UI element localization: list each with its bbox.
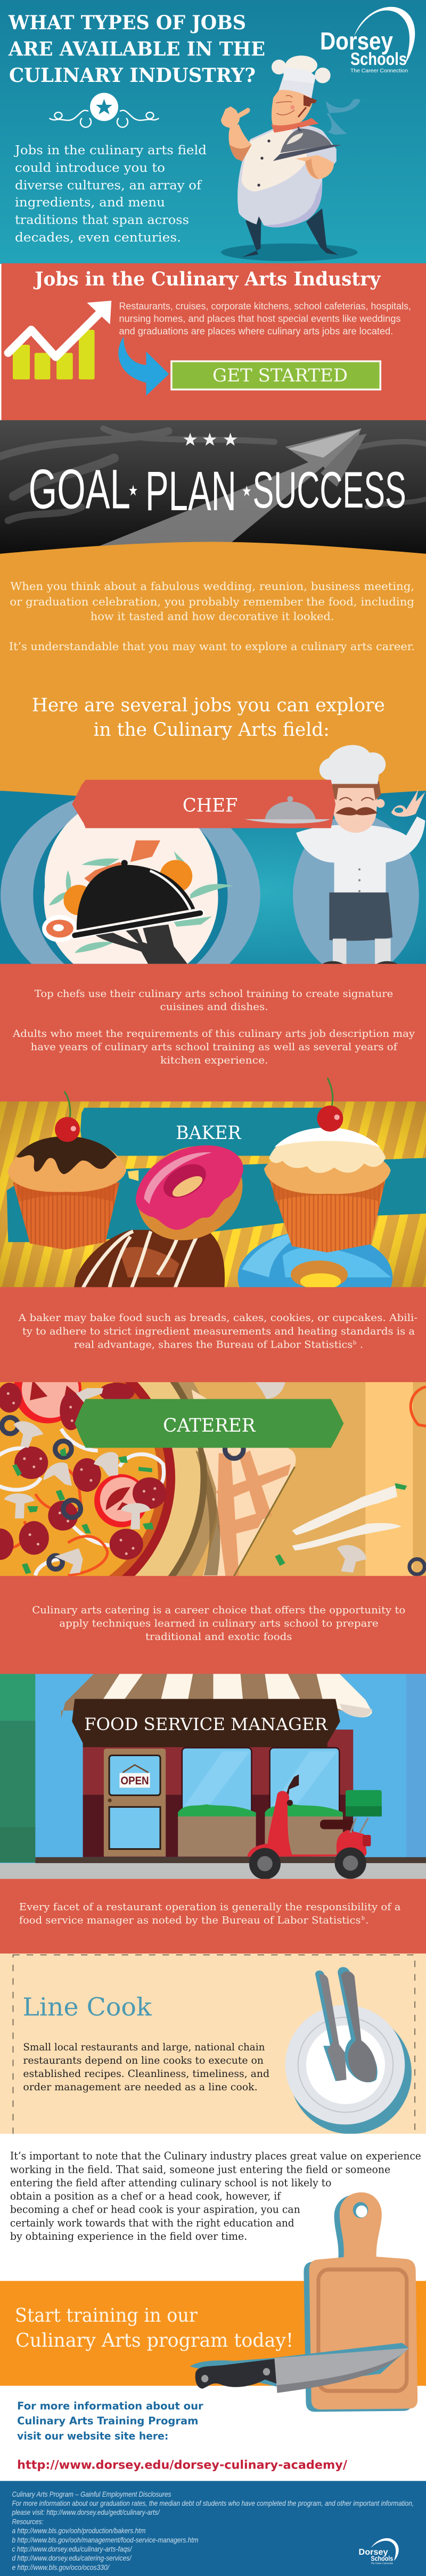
panel: baker description: . xyxy=(360,1340,363,1351)
sign: food service manager xyxy=(72,1699,340,1747)
napkin xyxy=(192,1390,296,1578)
illustration: pink donut xyxy=(121,1128,259,1258)
illustration: plate with fork and spoon xyxy=(285,1967,412,2134)
illustration: vanilla cupcake xyxy=(264,1078,391,1252)
logo: Dorsey Schools: Schools xyxy=(350,49,407,69)
arrow: chalk xyxy=(81,428,367,553)
title xyxy=(8,11,265,87)
description text: order management are needed as a line cook. xyxy=(23,2082,258,2093)
intro paragraph: When you think about a fabulous wedding, reunion, business meeting, xyxy=(10,580,414,593)
button: get started xyxy=(171,361,380,389)
illustration: mustached chef xyxy=(296,745,425,978)
heading: Line Cook xyxy=(22,1992,152,2022)
intro paragraph: how it tasted and how decorative it looked. xyxy=(91,610,334,622)
pizza xyxy=(0,1382,176,1576)
disclosure text: b http://www.bls.gov/ooh/management/food-service-managers.htm xyxy=(12,2536,199,2544)
experience text: becoming a chef or head cook is your aspiration, you can xyxy=(10,2204,300,2216)
panel: chef description: cuisines and dishes. xyxy=(160,1001,268,1012)
door: OPEN xyxy=(121,1774,149,1787)
button: get started: GET STARTED xyxy=(212,365,348,386)
cta text xyxy=(15,2305,293,2351)
panel: food service manager description: Every facet of a restaurant operation is generally the responsibility of a xyxy=(19,1901,401,1913)
banner: caterer xyxy=(75,1399,343,1448)
illustration: blue donut xyxy=(237,1231,392,1324)
section heading xyxy=(32,695,385,741)
panel: hero xyxy=(0,0,426,264)
description text: and graduations are places where culinary arts jobs are located. xyxy=(119,326,393,337)
experience text xyxy=(10,2151,421,2242)
panel: chef description: Adults who meet the requirements of this culinary arts job description may xyxy=(12,1028,415,1040)
banner: baker xyxy=(80,1108,323,1156)
intro text: could introduce you to xyxy=(15,161,165,175)
banner: chef xyxy=(72,780,335,828)
panel: closing note and call to action xyxy=(0,2134,426,2481)
description text: Restaurants, cruises, corporate kitchens, school cafeterias, hospitals, xyxy=(119,301,411,312)
panel: chef description: kitchen experience. xyxy=(160,1055,268,1066)
cta band xyxy=(0,2281,426,2386)
panel: line cook xyxy=(0,1954,426,2168)
experience text: certainly work towards that with the right education and xyxy=(10,2217,294,2229)
intro text: ingredients, and menu xyxy=(15,196,165,210)
planters xyxy=(178,1804,343,1857)
disclosure text xyxy=(12,2490,414,2571)
logo: small Dorsey Schools: Dorsey xyxy=(358,2548,388,2557)
disclosure text: d http://www.dorsey.edu/catering-services/ xyxy=(12,2554,132,2562)
panel: food service manager description: . xyxy=(365,1915,368,1926)
panel: baker description: A baker may bake food such as breads, cakes, cookies, or cupcakes. Abili- xyxy=(18,1312,417,1324)
illustration: cloche on plate xyxy=(42,795,234,964)
illustration: chef with cloche xyxy=(221,55,361,261)
description text: Small local restaurants and large, national chain xyxy=(23,2042,265,2053)
disclosure text: c http://www.dorsey.edu/culinary-arts-faqs/ xyxy=(12,2545,133,2553)
panel: baker description: real advantage, shares the Bureau of Labor Statistics xyxy=(74,1340,353,1351)
slogan: GOAL xyxy=(29,459,130,521)
slogan: PLAN xyxy=(145,460,236,522)
awning xyxy=(61,1674,372,1719)
panel: caterer description: Culinary arts catering is a career choice that offers the opportunity to xyxy=(32,1605,405,1616)
intro paragraph: It’s understandable that you may want to explore a culinary arts career. xyxy=(9,640,415,653)
panel: caterer xyxy=(0,1382,426,1576)
building xyxy=(83,1730,353,1857)
panel: food service manager xyxy=(0,1674,426,1880)
panel: jobs intro and chef xyxy=(0,542,426,1001)
disclosure text: a http://www.bls.gov/ooh/production/bakers.htm xyxy=(12,2527,146,2535)
panel: chef description: Top chefs use their culinary arts school training to create signature xyxy=(35,988,393,1000)
banner: chef: CHEF xyxy=(183,795,237,817)
door xyxy=(104,1749,166,1857)
rings behind plate and chef xyxy=(1,790,419,1001)
experience text: working in the field. That said, someone just entering the field or someone xyxy=(10,2164,390,2175)
description text: restaurants depend on line cooks to execute on xyxy=(23,2055,264,2066)
panel: food service manager description: b xyxy=(362,1916,365,1922)
intro text xyxy=(14,144,207,245)
banner: caterer: CATERER xyxy=(163,1415,256,1436)
ground xyxy=(0,1857,426,1879)
slogan xyxy=(29,459,406,522)
disclosure text: please visit: http://www.dorsey.edu/gedt/culinary-arts/ xyxy=(12,2508,160,2516)
description text xyxy=(23,2042,269,2093)
banner: baker: BAKER xyxy=(176,1123,241,1144)
illustration: cutting board and knife xyxy=(190,2192,417,2412)
logo: small Dorsey Schools: Schools xyxy=(371,2555,393,2563)
logo: small Dorsey Schools: The Career Connection xyxy=(371,2562,394,2565)
disclosure text: e http://www.bls.gov/oco/ocos330/ xyxy=(12,2563,110,2571)
disclosure text: Resources: xyxy=(12,2517,44,2525)
logo: Dorsey Schools: Dorsey xyxy=(320,27,393,55)
disclosure text: Culinary Arts Program – Gainful Employment Disclosures xyxy=(12,2490,171,2498)
logo: Dorsey Schools xyxy=(320,7,415,74)
slogan: ★ xyxy=(242,483,251,500)
description text xyxy=(119,301,411,337)
panel: baker description: ty to adhere to strict ingredient measurements and heating standards is a xyxy=(22,1326,415,1337)
icon: star ornament xyxy=(50,93,159,127)
heading: Jobs in the Culinary Arts Industry xyxy=(33,268,381,290)
section heading: Here are several jobs you can explore xyxy=(32,695,385,716)
more information text: For more information about our xyxy=(17,2401,203,2412)
panel: caterer description: apply techniques learned in culinary arts school to prepare xyxy=(59,1618,379,1630)
description text: established recipes. Cleanliness, timeliness, and xyxy=(23,2068,269,2080)
experience text: entering the field after attending culinary school is not likely to xyxy=(10,2178,331,2189)
illustration: serving dome over banner xyxy=(244,796,330,824)
panel: chef description xyxy=(0,964,426,1102)
teal ribbon xyxy=(7,1158,426,1242)
intro text: decades, even centuries. xyxy=(15,231,181,245)
title: WHAT TYPES OF JOBS xyxy=(8,11,246,34)
intro text: traditions that span across xyxy=(15,213,189,227)
description text: nursing homes, and places that host special events like weddings xyxy=(119,313,401,324)
more information text: Culinary Arts Training Program xyxy=(17,2416,198,2427)
panel: chef description: have years of culinary arts school training as well as several years of xyxy=(31,1042,398,1053)
panel: food service manager description xyxy=(0,1879,426,1954)
more information text xyxy=(17,2401,203,2442)
panel: chalkboard goal plan success xyxy=(0,420,426,559)
title: CULINARY INDUSTRY? xyxy=(9,64,256,87)
experience text: It’s important to note that the Culinary industry places great value on experience xyxy=(10,2151,421,2162)
panel: caterer description xyxy=(0,1576,426,1674)
cta text: Culinary Arts program today! xyxy=(15,2330,293,2351)
panel: baker xyxy=(0,1078,426,1324)
scattered toppings xyxy=(225,1382,426,1574)
experience text: obtain a position as a chef or a head cook, however, if xyxy=(10,2191,282,2202)
title: ARE AVAILABLE IN THE xyxy=(8,37,265,61)
logo: small Dorsey Schools xyxy=(358,2538,399,2565)
arrow: blue curved xyxy=(118,337,169,396)
logo: Dorsey Schools: The Career Connection xyxy=(350,68,408,74)
intro text: diverse cultures, an array of xyxy=(15,179,202,193)
fork and knife xyxy=(292,1485,402,1550)
cta text: Start training in our xyxy=(15,2305,198,2326)
intro text: Jobs in the culinary arts field xyxy=(14,144,207,157)
panel: caterer description: traditional and exotic foods xyxy=(145,1632,292,1643)
illustration: chocolate donut xyxy=(73,1230,225,1291)
more information text: visit our website site here: xyxy=(17,2431,168,2442)
windows xyxy=(182,1748,339,1824)
slogan: ★ xyxy=(128,483,138,499)
panel: food service manager description: food service manager as noted by the Bureau of Labor Statistics xyxy=(19,1915,361,1926)
sign: food service manager: FOOD SERVICE MANAGER xyxy=(84,1714,328,1734)
panel: footer disclosures xyxy=(0,2481,426,2576)
section heading: in the Culinary Arts field: xyxy=(94,719,330,741)
illustration: chocolate cupcake xyxy=(7,1092,126,1250)
intro paragraph xyxy=(9,580,415,653)
experience text: by obtaining experience in the field over time. xyxy=(10,2231,247,2242)
panel: jobs in the culinary arts industry xyxy=(2,263,426,421)
orange intro section xyxy=(0,542,426,803)
panel: baker description xyxy=(0,1287,426,1383)
illustration: red scooter xyxy=(247,1774,382,1880)
icon: rising chart xyxy=(8,301,111,379)
panel: baker description: b xyxy=(353,1340,357,1346)
intro paragraph: or graduation celebration, you probably remember the food, including xyxy=(10,595,414,608)
stars xyxy=(183,433,237,446)
website link: http://www.dorsey.edu/dorsey-culinary-academy/ xyxy=(17,2458,348,2472)
